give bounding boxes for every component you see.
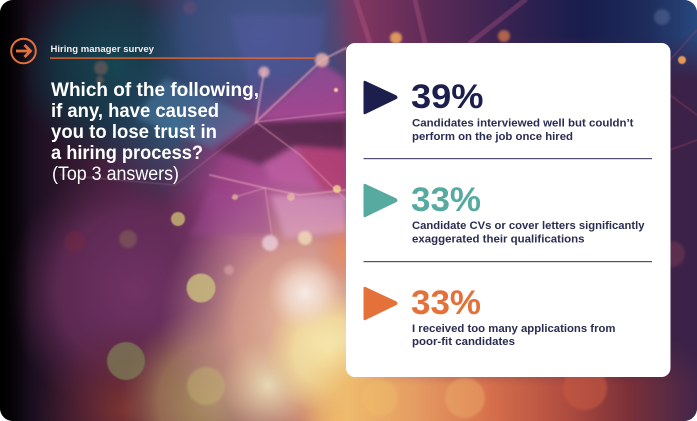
heading: Which of the following, bbox=[51, 80, 259, 101]
panel: survey results bbox=[346, 43, 670, 377]
heading: (Top 3 answers) bbox=[52, 164, 179, 185]
description 3 bbox=[412, 323, 616, 348]
heading: a hiring process? bbox=[51, 143, 203, 164]
icon: circled arrow bbox=[11, 39, 36, 63]
description 2 bbox=[412, 220, 644, 246]
icon: orange triangle bbox=[364, 287, 398, 320]
heading bbox=[51, 80, 259, 185]
description 1 bbox=[412, 118, 634, 143]
figure 39%: 39% bbox=[411, 78, 484, 116]
survey label: Hiring manager survey bbox=[50, 44, 154, 54]
description 2: exaggerated their qualifications bbox=[412, 234, 584, 246]
result 3: 33% bbox=[364, 284, 616, 348]
label underline bbox=[50, 57, 316, 59]
result 2: 33% bbox=[364, 181, 644, 246]
description 3: poor-fit candidates bbox=[412, 336, 515, 348]
icon: teal triangle bbox=[364, 184, 398, 217]
facets bbox=[135, 15, 346, 238]
figure 33% orange: 33% bbox=[411, 284, 481, 322]
icon: navy triangle bbox=[364, 81, 398, 114]
description 1: perform on the job once hired bbox=[412, 131, 573, 143]
result 1: 39% bbox=[364, 78, 634, 143]
description 3: I received too many applications from bbox=[412, 323, 616, 335]
network lines bbox=[60, 0, 697, 235]
heading: if any, have caused bbox=[51, 101, 219, 122]
description 1: Candidates interviewed well but couldn’t bbox=[412, 118, 634, 130]
description 2: Candidate CVs or cover letters significantly bbox=[412, 220, 644, 232]
figure 33% teal: 33% bbox=[411, 181, 481, 219]
heading: you to lose trust in bbox=[51, 122, 217, 143]
